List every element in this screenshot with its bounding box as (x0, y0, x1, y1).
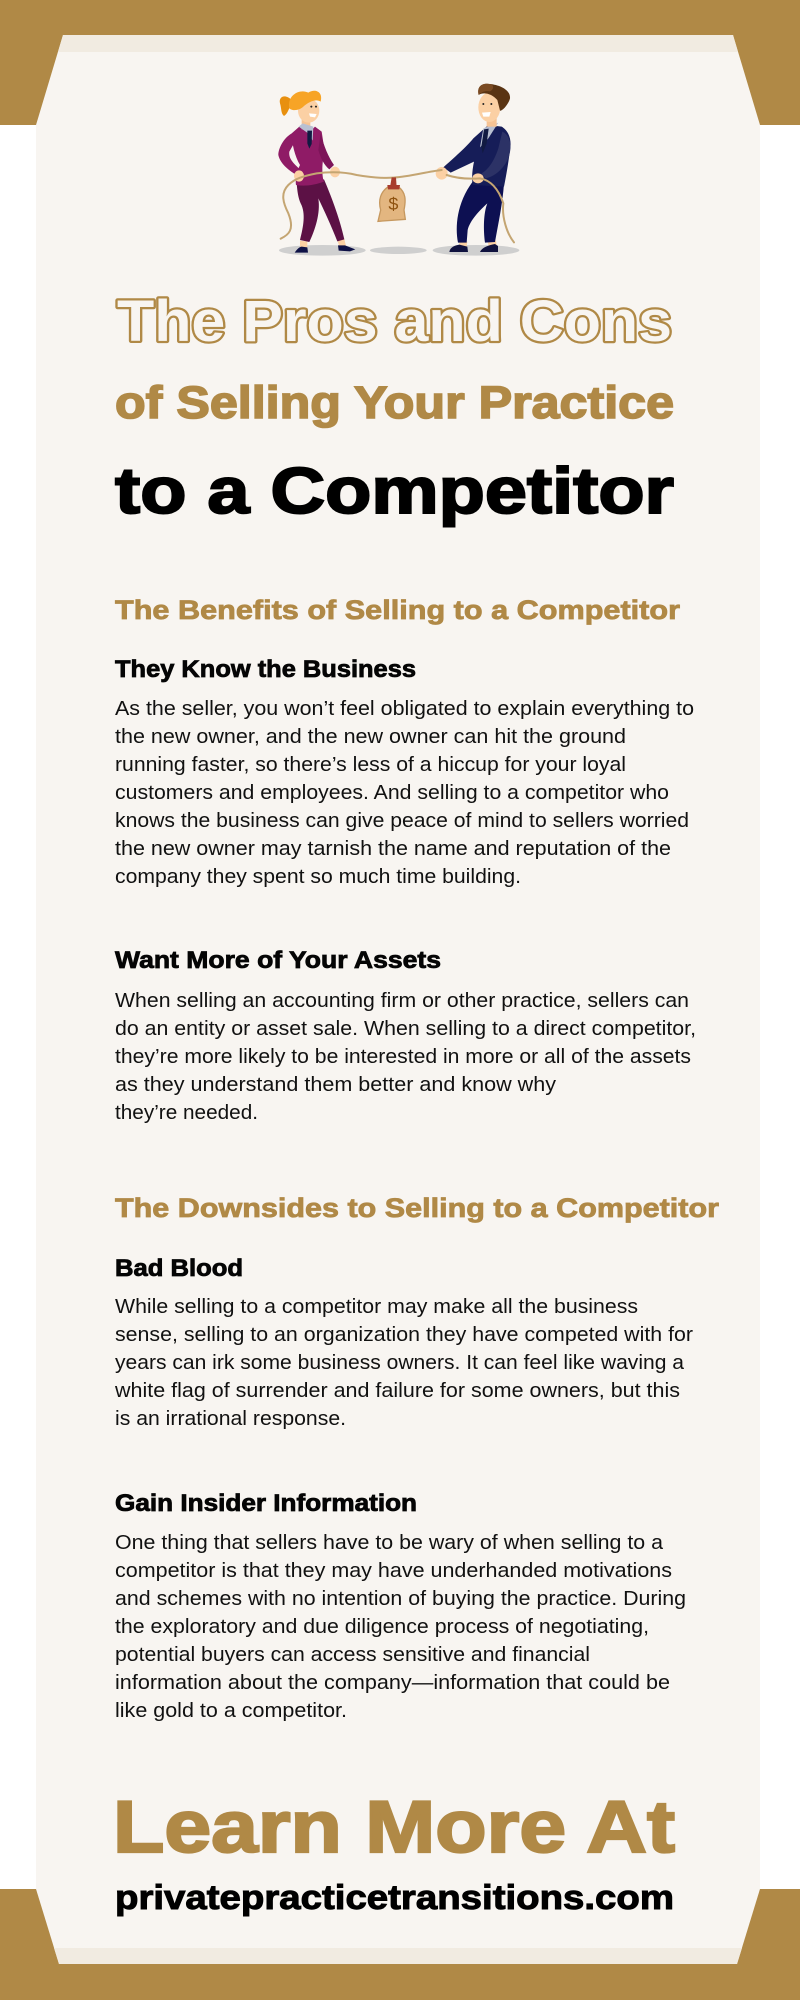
body text: and schemes with no intention of buying the practice. During (115, 1588, 686, 1610)
rope (281, 170, 514, 242)
body text: knows the business can give peace of mind to sellers worried (115, 810, 689, 832)
man pulling rope (436, 84, 511, 252)
subheading: Bad Blood (115, 1255, 243, 1282)
body text: the new owner, and the new owner can hit the ground (115, 726, 626, 748)
body text: information about the company—information that could be (115, 1672, 670, 1694)
body text: potential buyers can access sensitive and financial (115, 1644, 590, 1666)
website address: privatepracticetransitions.com (115, 1879, 674, 1917)
subsection: Bad Blood (114, 1255, 693, 1430)
body text: as they understand them better and know why (115, 1074, 556, 1096)
body text (114, 1296, 693, 1430)
title line 1: outlined: The Pros and Cons (117, 289, 672, 354)
body text (115, 698, 694, 888)
body text: running faster, so there’s less of a hiccup for your loyal (115, 754, 626, 776)
body text: As the seller, you won’t feel obligated to explain everything to (115, 698, 694, 720)
body text: sense, selling to an organization they have competed with for (115, 1324, 693, 1346)
subsection: They Know the Business (115, 656, 694, 888)
body text: they’re more likely to be interested in more or all of the assets (115, 1046, 691, 1068)
body text: company they spent so much time building. (115, 866, 521, 888)
body text: One thing that sellers have to be wary of when selling to a (115, 1532, 664, 1554)
body text: the exploratory and due diligence process of negotiating, (115, 1616, 649, 1638)
body text: customers and employees. And selling to a competitor who (115, 782, 669, 804)
body text: the new owner may tarnish the name and reputation of the (115, 838, 671, 860)
subheading: Want More of Your Assets (115, 947, 441, 974)
section heading: benefits: The Benefits of Selling to a Competitor (115, 595, 681, 625)
call to action (113, 1787, 675, 1917)
title line 2: of Selling Your Practice (115, 377, 674, 428)
body text: When selling an accounting firm or other practice, sellers can (115, 990, 689, 1012)
top gold band (0, 0, 800, 125)
subheading: They Know the Business (115, 656, 416, 683)
body text: like gold to a competitor. (115, 1700, 347, 1722)
bottom gold band (0, 1889, 800, 2000)
body text (115, 1532, 686, 1722)
section heading: downsides: The Downsides to Selling to a Competitor (115, 1193, 720, 1223)
woman pulling rope (278, 91, 355, 253)
body text: white flag of surrender and failure for some owners, but this (114, 1380, 680, 1402)
body text (115, 990, 696, 1124)
Learn More At: Learn More At (113, 1787, 675, 1868)
title line 3: to a Competitor (115, 454, 674, 527)
body text: do an entity or asset sale. When selling to a direct competitor, (115, 1018, 696, 1040)
body text: years can irk some business owners. It can feel like waving a (115, 1352, 685, 1374)
money bag: $ (388, 194, 398, 214)
floor shadows (279, 245, 519, 256)
money bag (378, 177, 405, 221)
body text: is an irrational response. (115, 1408, 346, 1430)
body text: they’re needed. (115, 1102, 258, 1124)
body text: While selling to a competitor may make all the business (115, 1296, 638, 1318)
illustration: tug of war over a money bag (278, 84, 519, 256)
subsection: Gain Insider Information (115, 1490, 686, 1722)
subheading: Gain Insider Information (115, 1490, 417, 1517)
title (115, 289, 674, 527)
subsection: Want More of Your Assets (115, 947, 696, 1124)
body text: competitor is that they may have underhanded motivations (115, 1560, 672, 1582)
